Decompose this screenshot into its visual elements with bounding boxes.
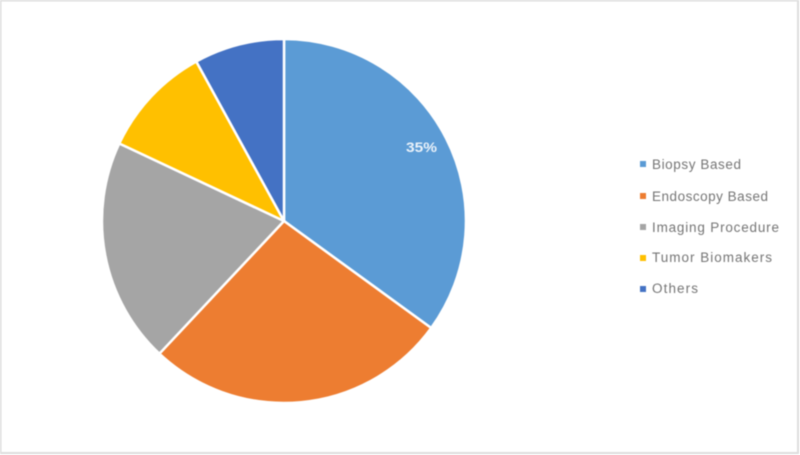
- slice: Endoscopy Based: [159, 221, 431, 403]
- legend: [640, 157, 779, 296]
- legend item: Imaging Procedure: Imaging Procedure: [652, 220, 779, 235]
- pie chart: [102, 39, 466, 403]
- data label: 35%: 35%: [406, 139, 438, 155]
- legend item: Biopsy Based: Biopsy Based: [652, 157, 741, 172]
- slice: Others: [196, 39, 284, 221]
- legend item: Others: Others: [652, 281, 698, 296]
- legend item: Endoscopy Based: Endoscopy Based: [652, 189, 768, 204]
- legend item: Tumor Biomakers: Tumor Biomakers: [652, 250, 772, 265]
- slice: Imaging Procedure: [102, 144, 284, 354]
- slice: Biopsy Based: [284, 39, 466, 328]
- slice: Tumor Biomakers: [119, 62, 284, 221]
